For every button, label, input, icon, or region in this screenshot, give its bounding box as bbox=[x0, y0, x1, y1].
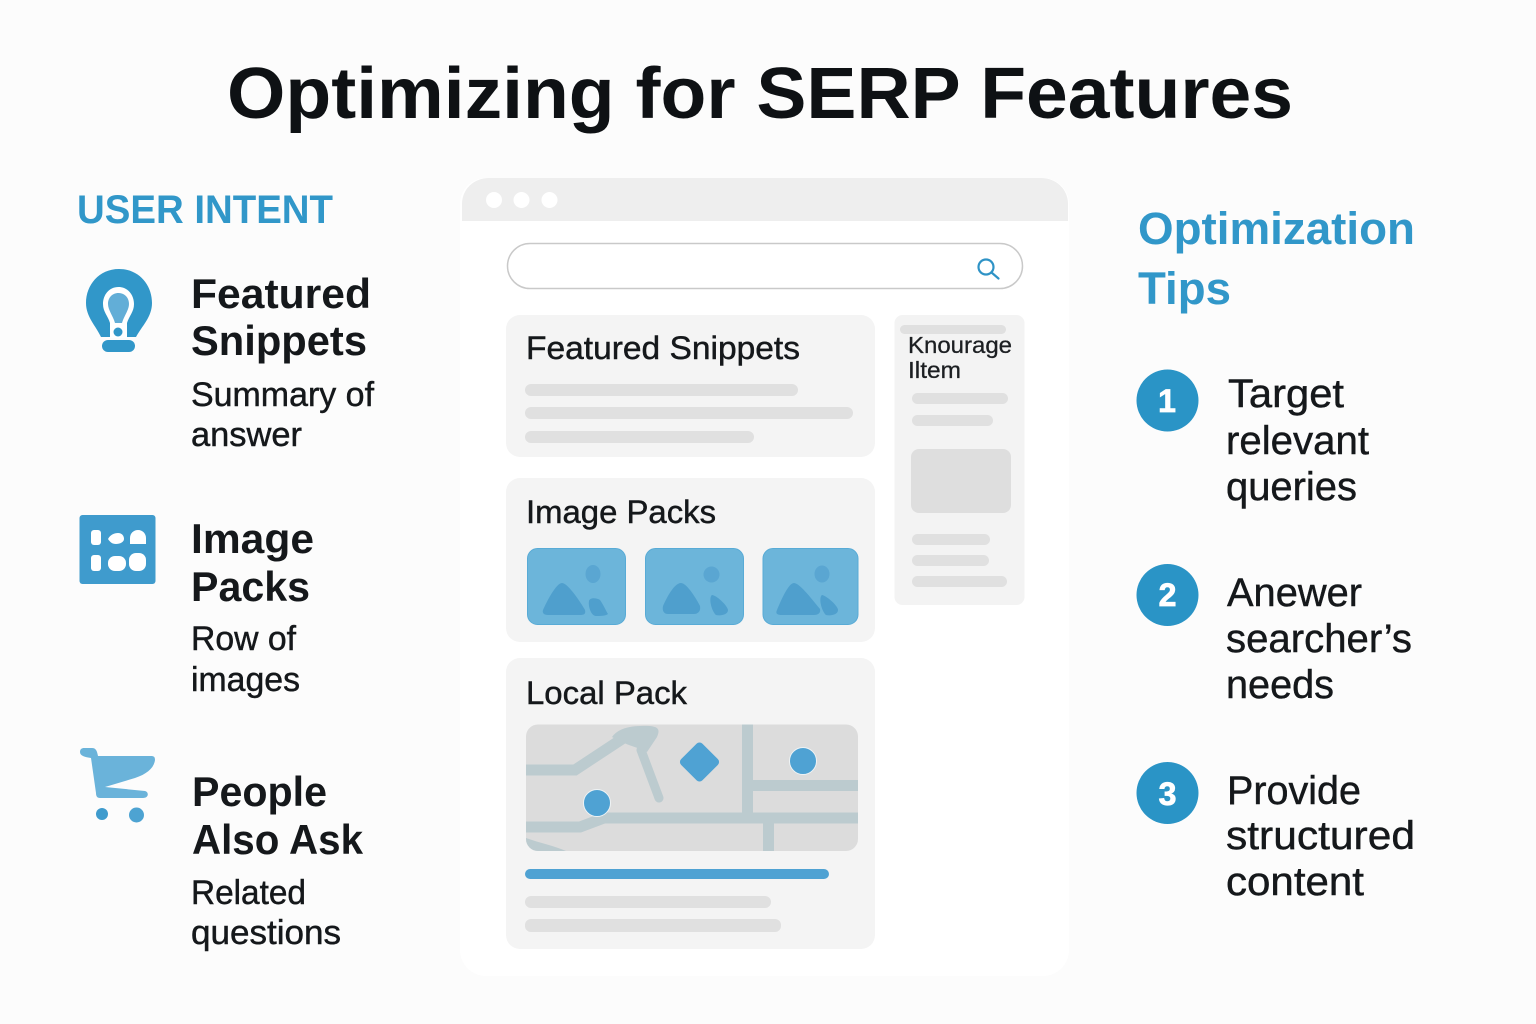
panel: optimization tips bbox=[1136, 203, 1415, 904]
panel: user intent bbox=[77, 188, 375, 952]
item: featured snippets bbox=[86, 269, 375, 454]
heading: user intent: USER INTENT bbox=[77, 188, 333, 232]
icon: search bbox=[978, 260, 998, 278]
heading line 2: Packs bbox=[191, 563, 310, 610]
heading line 2: Tips bbox=[1138, 263, 1231, 314]
card: featured snippets bbox=[506, 315, 875, 457]
image thumbnail 3 bbox=[763, 548, 858, 624]
heading: featured snippets: Featured bbox=[191, 270, 371, 317]
card heading: Image Packs bbox=[526, 494, 716, 530]
tip 3 bbox=[1136, 762, 1415, 904]
heading: image packs: Image bbox=[191, 515, 314, 562]
number badge 3 bbox=[1136, 762, 1198, 824]
tip 1 bbox=[1136, 370, 1369, 509]
description line 2: answer bbox=[191, 416, 302, 454]
tip text line 2: structured bbox=[1226, 814, 1415, 858]
title: Optimizing for SERP Features bbox=[227, 54, 1293, 134]
sidebar heading: Knourage bbox=[908, 332, 1012, 358]
search bar bbox=[508, 244, 1022, 288]
tip text line 1: Anewer bbox=[1227, 571, 1362, 615]
card: local pack bbox=[506, 658, 875, 949]
browser window bbox=[460, 178, 1069, 976]
tip text line 1: Provide bbox=[1227, 769, 1361, 813]
tip text line 3: needs bbox=[1226, 663, 1334, 707]
number badge 2 bbox=[1136, 564, 1198, 626]
tip text line 1: Target bbox=[1228, 372, 1344, 416]
icon: light bulb bbox=[86, 269, 152, 352]
heading line 2: Also Ask bbox=[192, 816, 364, 863]
heading line 2: Snippets bbox=[191, 317, 367, 364]
panel: browser mockup bbox=[460, 178, 1069, 976]
icon: image grid bbox=[80, 515, 156, 584]
item: image packs bbox=[80, 515, 314, 699]
description line 2: questions bbox=[191, 914, 341, 952]
card: image packs bbox=[506, 478, 875, 642]
tip text line 2: searcher’s bbox=[1226, 617, 1412, 661]
description: row of images: Row of bbox=[191, 620, 297, 658]
sidebar image bbox=[911, 449, 1011, 513]
number badge 1: 1 bbox=[1158, 383, 1176, 419]
number badge 3: 3 bbox=[1159, 776, 1176, 812]
item: people also ask bbox=[80, 748, 364, 952]
number badge 2: 2 bbox=[1159, 577, 1176, 613]
heading: people also ask: People bbox=[192, 768, 327, 815]
tip 2 bbox=[1136, 564, 1412, 707]
heading: optimization tips: Optimization bbox=[1138, 203, 1415, 254]
browser title bar bbox=[462, 178, 1068, 221]
image thumbnail 1 bbox=[528, 548, 626, 624]
tip text line 3: content bbox=[1226, 860, 1364, 904]
description: related questions: Related bbox=[191, 874, 306, 912]
card heading: Local Pack bbox=[526, 675, 688, 711]
card: knowledge sidebar bbox=[894, 315, 1024, 605]
sidebar heading line 2: Iltem bbox=[908, 357, 961, 383]
tip text line 2: relevant bbox=[1226, 419, 1369, 463]
description: summary of answer: Summary of bbox=[191, 376, 375, 414]
image thumbnail 2 bbox=[646, 548, 744, 624]
description line 2: images bbox=[191, 661, 300, 699]
tip text line 3: queries bbox=[1226, 465, 1357, 509]
map bbox=[526, 724, 858, 851]
number badge 1 bbox=[1136, 370, 1198, 432]
icon: shopping cart bbox=[80, 748, 155, 822]
card heading: Featured Snippets bbox=[526, 330, 800, 366]
